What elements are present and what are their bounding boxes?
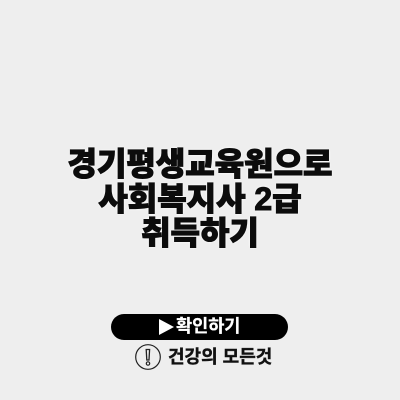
title: 취득하기: [141, 215, 259, 251]
icon: play triangle: [159, 319, 174, 335]
caption: brand name: 건강의 모든것: [168, 347, 272, 367]
button: confirm: [111, 314, 288, 340]
title: 사회복지사 2급: [98, 180, 302, 216]
button label: 확인하기: [176, 316, 240, 336]
title: [68, 146, 332, 251]
icon: exclamation circle: [135, 344, 161, 370]
title: 경기평생교육원으로: [68, 146, 332, 182]
